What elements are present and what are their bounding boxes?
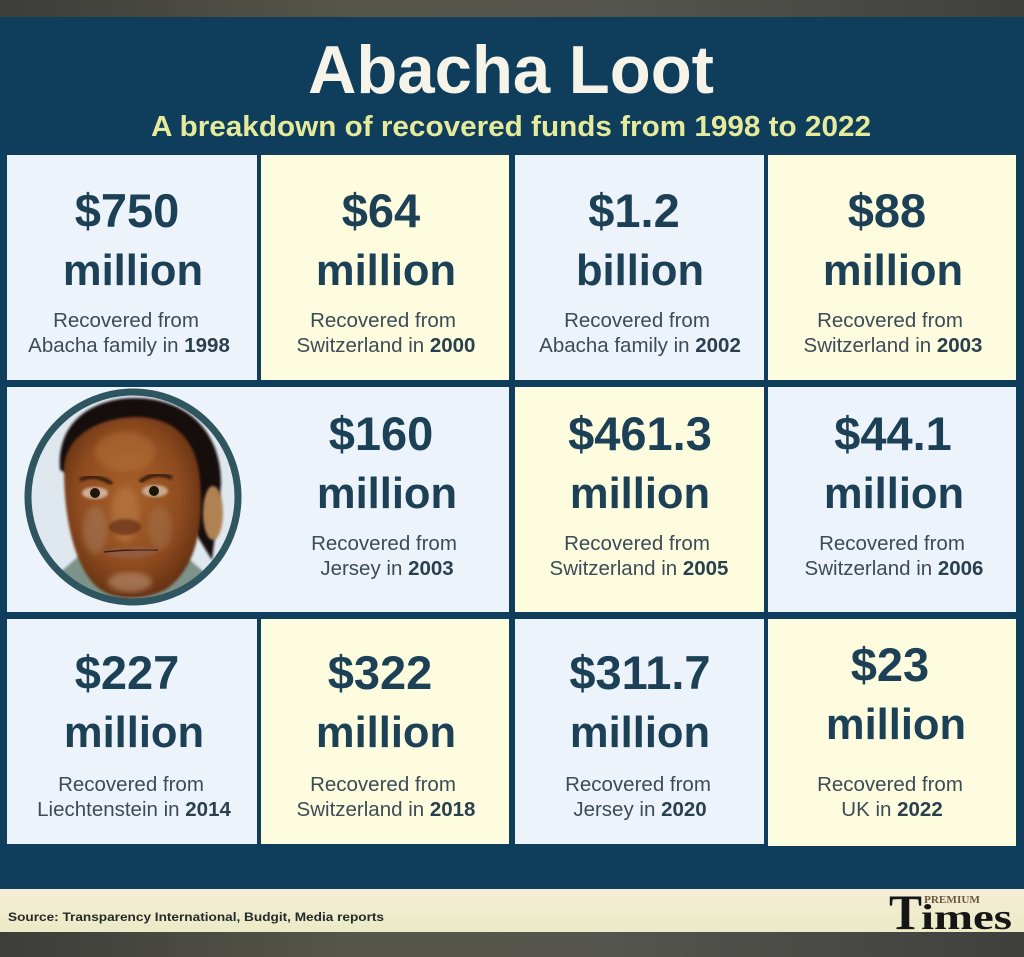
card: $44.1 million: $44.1 <box>834 407 952 460</box>
card: $311.7 million <box>515 619 764 844</box>
card: $750 million: Recovered from <box>53 309 199 332</box>
card: $88 million: million <box>823 247 963 295</box>
card: $160 million with portrait <box>7 387 509 620</box>
eyes <box>82 487 108 499</box>
card: $227 million: Liechtenstein in 2014 <box>37 798 231 821</box>
card: $750 million: $750 <box>75 184 179 237</box>
card: $64 million: million <box>316 247 456 295</box>
card: $322 million: $322 <box>328 646 432 699</box>
card: $88 million: Switzerland in 2003 <box>804 334 982 357</box>
card: $227 million <box>7 619 257 844</box>
nose <box>109 519 141 535</box>
card: $160 million with portrait: million <box>317 470 457 518</box>
card: $64 million: Switzerland in 2000 <box>297 334 475 357</box>
card: $461.3 million: million <box>570 470 710 518</box>
card: $322 million: Switzerland in 2018 <box>297 798 475 821</box>
Premium Times logo: PREMIUM <box>924 895 981 906</box>
card: $160 million with portrait: Jersey in 2003 <box>320 557 454 580</box>
card: $44.1 million: Recovered from <box>819 532 965 555</box>
portrait of Sani Abacha <box>28 392 238 620</box>
card: $23 million <box>768 619 1016 846</box>
card: $64 million: $64 <box>342 184 420 237</box>
card: $311.7 million: Recovered from <box>565 773 711 796</box>
Premium Times logo <box>889 884 1012 940</box>
card: $461.3 million <box>515 387 764 612</box>
card: $227 million: Recovered from <box>58 773 204 796</box>
bottom photo-edge band <box>0 932 1024 957</box>
card: $23 million: $23 <box>851 638 929 691</box>
title: Abacha Loot <box>308 32 714 108</box>
card: $311.7 million: Jersey in 2020 <box>573 798 707 821</box>
card: $461.3 million: Recovered from <box>564 532 710 555</box>
card: $1.2 billion <box>515 155 764 380</box>
card: $44.1 million: Switzerland in 2006 <box>805 557 983 580</box>
card: $461.3 million: $461.3 <box>568 407 712 460</box>
card: $1.2 billion: billion <box>576 247 704 295</box>
card: $322 million: million <box>316 709 456 757</box>
card: $160 million with portrait: Recovered from <box>311 532 457 555</box>
card: $1.2 billion: Recovered from <box>564 309 710 332</box>
Premium Times logo: T <box>889 884 922 940</box>
source note: Source: Transparency International, Budgit, Media reports <box>8 910 384 924</box>
card: $750 million: Abacha family in 1998 <box>28 334 230 357</box>
card: $44.1 million <box>768 387 1016 612</box>
card: $311.7 million: $311.7 <box>569 646 711 699</box>
card: $44.1 million: million <box>824 470 964 518</box>
card: $88 million: Recovered from <box>817 309 963 332</box>
card: $750 million: million <box>63 247 203 295</box>
Premium Times logo: imes <box>921 897 1012 937</box>
card: $1.2 billion: $1.2 <box>588 184 680 237</box>
mouth <box>102 546 160 559</box>
card: $311.7 million: million <box>570 709 710 757</box>
brows <box>80 477 112 484</box>
card: $461.3 million: Switzerland in 2005 <box>550 557 728 580</box>
card: $23 million: Recovered from <box>817 773 963 796</box>
card: $88 million <box>768 155 1016 380</box>
card: $23 million: million <box>826 701 966 749</box>
card: $160 million with portrait: $160 <box>329 407 433 460</box>
card: $64 million <box>261 155 509 380</box>
card: $322 million <box>261 619 509 844</box>
card: $64 million: Recovered from <box>310 309 456 332</box>
card: $227 million: million <box>64 709 204 757</box>
card: $1.2 billion: Abacha family in 2002 <box>539 334 741 357</box>
card: $750 million <box>7 155 257 380</box>
card: $88 million: $88 <box>848 184 926 237</box>
card: $23 million: UK in 2022 <box>841 798 943 821</box>
top photo-edge band <box>0 0 1024 17</box>
card: $227 million: $227 <box>75 646 179 699</box>
subtitle: A breakdown of recovered funds from 1998 to 2022 <box>151 111 871 143</box>
card: $322 million: Recovered from <box>310 773 456 796</box>
footer band <box>0 889 1024 932</box>
